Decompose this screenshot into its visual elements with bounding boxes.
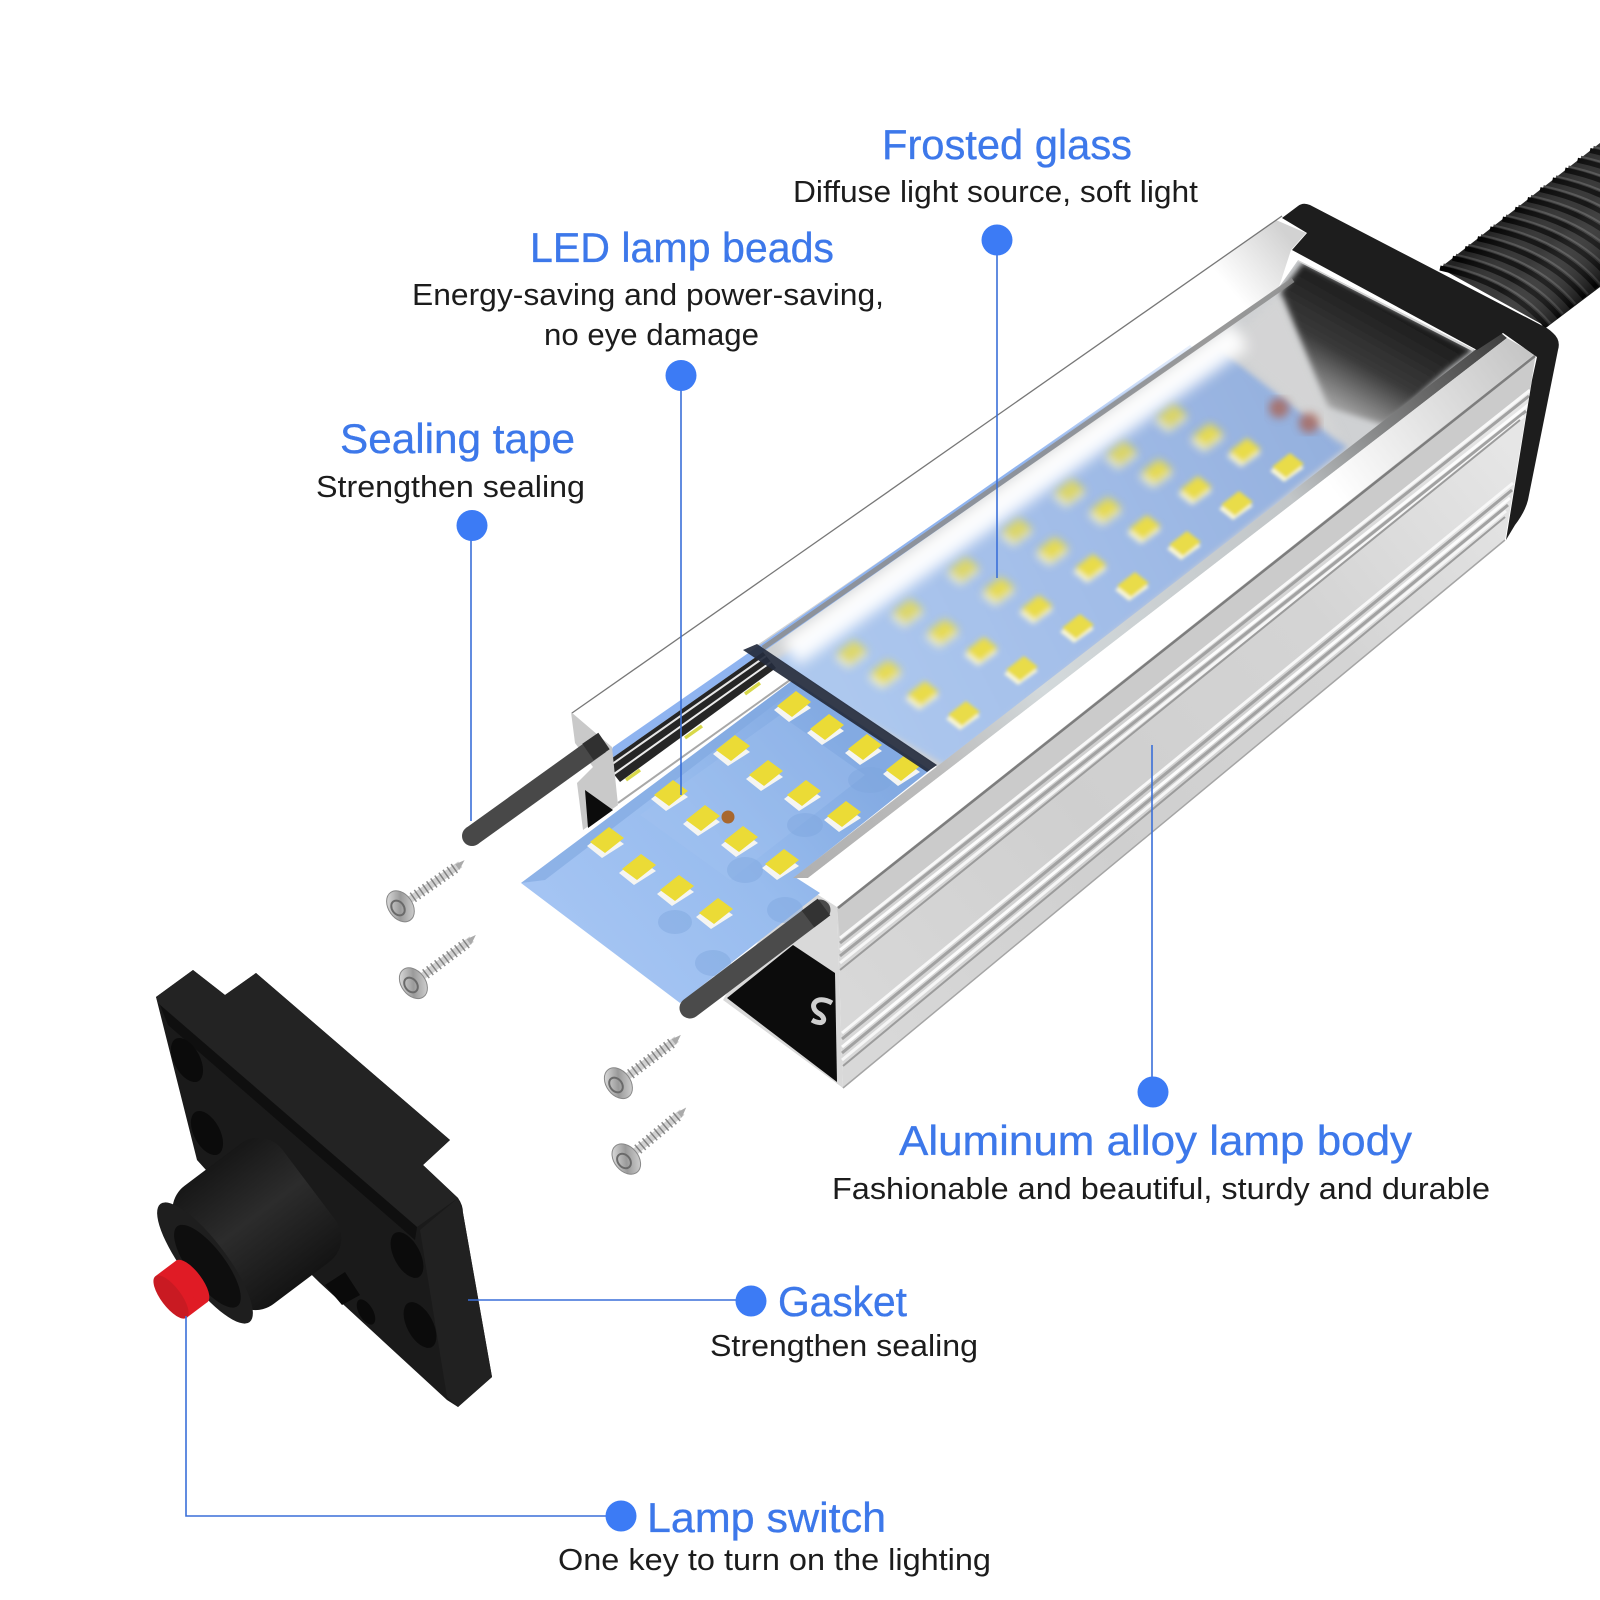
far aluminium rail [572,216,1306,750]
marker dot [456,510,488,541]
glass upper edge reflection [605,280,1293,763]
leader line [470,525,472,821]
marker dot [666,360,696,391]
heading: Aluminum alloy lamp body [899,1117,1412,1164]
rear clip detail [325,1272,379,1328]
callout: aluminum alloy lamp body [832,745,1490,1206]
reflected LEDs in fins [626,683,760,780]
collar [163,1215,252,1317]
callout: LED lamp beads [412,224,884,795]
inner wall [793,333,1507,878]
plate top band [156,970,458,1227]
lower ridges [842,483,1513,1066]
left end profile [571,712,618,830]
screw 1 [381,847,475,927]
frosted LEDs, third row [868,423,1224,689]
frosted LEDs, near row [946,453,1304,730]
leader line [186,1316,621,1516]
brown components [1269,398,1319,433]
slot [160,1005,417,1240]
board shadows [658,767,892,976]
marker dot [606,1500,636,1532]
leader line [680,375,682,795]
board LEDs [587,691,920,929]
switch cylinder [143,1126,353,1335]
leader line [468,1299,751,1301]
description line 2: no eye damage [544,317,759,352]
heading: Lamp switch [647,1494,886,1541]
screw 3 [599,1022,692,1104]
front end of body [723,880,843,1088]
black end cap [1282,204,1559,540]
callout: lamp switch [186,1316,991,1577]
callout: sealing tape [316,415,585,821]
plate silhouette [156,970,492,1407]
mounting holes [164,1033,443,1353]
lamp body assembly [462,143,1600,1088]
aluminium side face [837,353,1536,1088]
near aluminium rail [793,333,1536,907]
callout: frosted glass [793,121,1198,578]
description: Strengthen sealing [710,1328,978,1363]
clip detail [812,1000,832,1023]
callout: gasket [468,1278,978,1363]
right sealing rod [690,907,824,1008]
leader line [996,240,998,578]
marker dot [982,224,1012,256]
screw 2 [394,922,487,1004]
description: Fashionable and beautiful, sturdy and durable [832,1171,1490,1206]
upper ridges [840,390,1530,970]
marker dot [736,1286,766,1316]
heading: Sealing tape [340,415,575,462]
LED circuit board [521,680,930,1003]
white top [808,338,1536,907]
description: Energy-saving and power-saving, [412,277,884,312]
left channel and fins [605,652,790,803]
switch end plate [143,970,492,1407]
frosted LEDs, far row [834,404,1188,669]
screws [381,847,698,1180]
leader line [1151,745,1153,1092]
left sealing rod [462,741,604,846]
description: Diffuse light source, soft light [793,174,1198,209]
heading: Frosted glass [882,121,1132,168]
red button [147,1255,215,1324]
sealing tape band [743,644,937,772]
heading: LED lamp beads [530,224,834,271]
frosted LEDs, second row [905,438,1261,710]
description: One key to turn on the lighting [558,1542,991,1577]
heading: Gasket [778,1278,907,1325]
description: Strengthen sealing [316,469,585,504]
screw 4 [606,1095,698,1180]
frosted glass with blurred LEDs [757,260,1475,767]
gooseneck tube [1440,143,1600,327]
plate thick side [420,1198,492,1407]
marker dot [1138,1076,1168,1108]
